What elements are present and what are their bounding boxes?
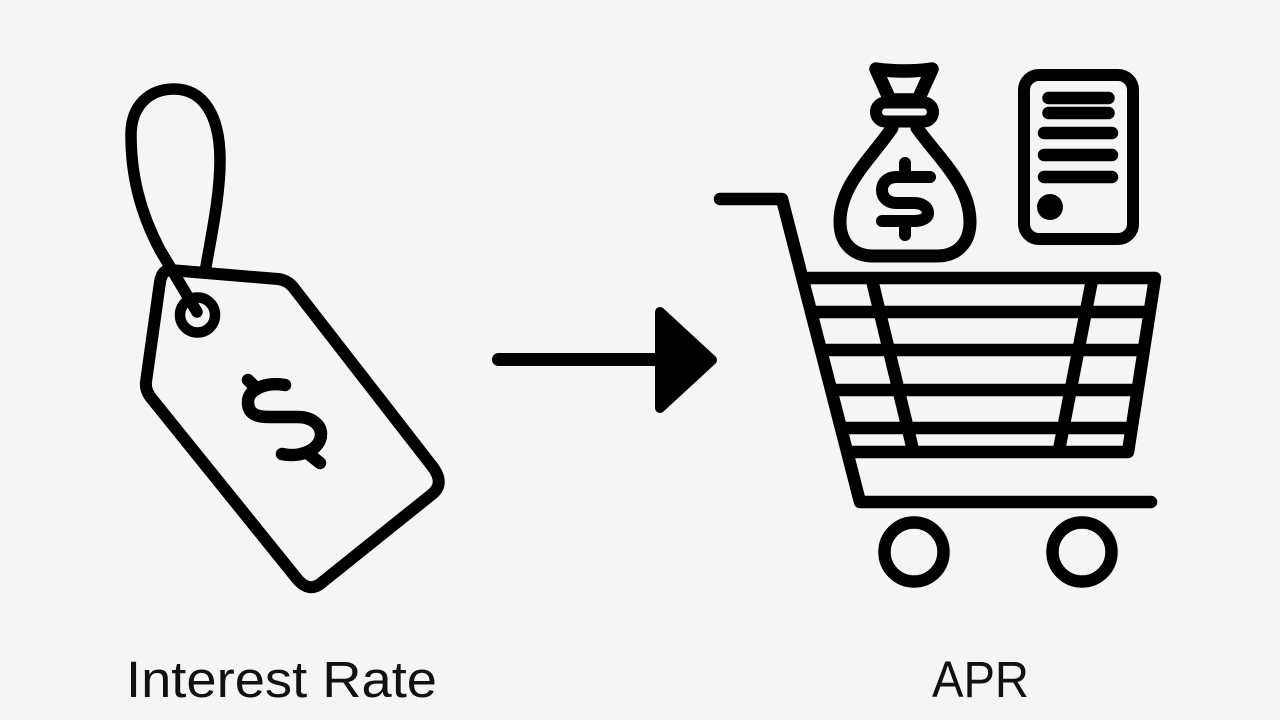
arrow head <box>660 312 712 408</box>
tag dollar sign <box>248 380 321 463</box>
cart horizontal bars <box>807 312 1150 428</box>
cart right wheel <box>1052 522 1112 582</box>
icon: money bag <box>840 69 970 256</box>
bag knot <box>876 102 933 122</box>
tag string loop <box>131 89 220 312</box>
icon: document <box>1024 75 1133 239</box>
bag dollar sign <box>882 163 930 235</box>
cart left wheel <box>884 522 944 582</box>
tag eyelet <box>180 298 215 332</box>
document text lines <box>1044 98 1112 177</box>
cart basket outline <box>808 278 1155 452</box>
bag neck tie <box>876 69 932 100</box>
label: interest rate: Interest Rate <box>126 651 437 708</box>
arrow <box>498 312 712 408</box>
cart vertical struts <box>872 280 1092 450</box>
arrow shaft <box>498 353 665 366</box>
document seal dot <box>1037 194 1063 220</box>
bag body <box>840 128 970 256</box>
cart handle and frame <box>720 199 1151 502</box>
icon: shopping cart <box>720 199 1155 582</box>
label: APR: APR <box>932 651 1029 708</box>
document outline <box>1024 75 1133 239</box>
tag outline <box>146 270 439 587</box>
icon: price tag <box>131 89 439 587</box>
